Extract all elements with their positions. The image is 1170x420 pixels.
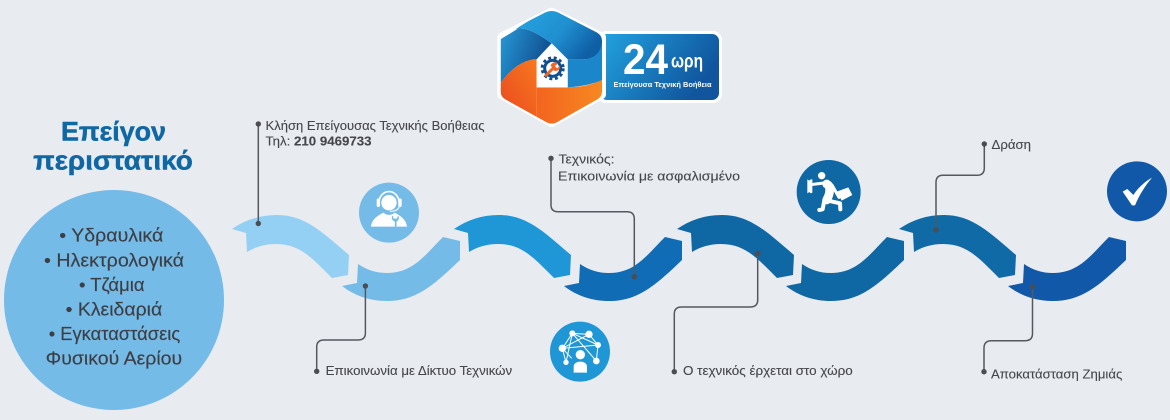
logo badge: 24 ωρη — [597, 31, 722, 103]
step: contact with technician network: Επικοινωνία με Δίκτυο Τεχνικών — [326, 363, 512, 378]
arrow segment 7 — [899, 215, 1016, 278]
icon: check mark — [1107, 161, 1167, 221]
panel: service list circle: • Υδραυλικά — [59, 225, 164, 246]
step: technician arrives on site — [672, 251, 853, 378]
logo hexagon emblem — [497, 7, 605, 127]
step: technician contacts insured — [548, 151, 740, 279]
arrow segment 3 — [454, 215, 571, 278]
arrow segment 6 — [786, 237, 904, 301]
panel: service list circle: • Ηλεκτρολογικά — [44, 250, 184, 270]
step: contact with technician network — [314, 283, 512, 378]
step: technician arrives on site: Ο τεχνικός έρχεται στο χώρο — [683, 363, 853, 378]
panel: service list circle: Φυσικού Αερίου — [46, 347, 182, 368]
title: περιστατικό — [33, 145, 193, 175]
logo: 24-hour emergency technical assistance — [497, 7, 722, 127]
arrow segment 4 — [564, 237, 682, 301]
step: technician contacts insured: Τεχνικός: — [558, 151, 614, 166]
step: damage restoration — [981, 284, 1122, 381]
wave arrow process — [232, 215, 1126, 301]
panel: service list circle: • Κλειδαριά — [66, 298, 163, 319]
title: Επείγον — [61, 117, 166, 147]
arrow segment 5 — [677, 215, 794, 278]
step: action — [933, 137, 1031, 233]
logo badge: 24 ωρη: ωρη — [671, 52, 703, 72]
logo badge: 24 ωρη: 24 — [623, 36, 668, 84]
icon: technician network — [550, 322, 610, 382]
title — [33, 117, 193, 175]
step: call for emergency assistance: Τηλ: 210 9469733 — [266, 134, 372, 149]
step: technician contacts insured: Επικοινωνία με ασφαλισμένο — [558, 169, 740, 184]
icon: call-centre agent with wrench — [359, 183, 419, 243]
step: call for emergency assistance — [256, 118, 484, 226]
step: call for emergency assistance: Κλήση Επείγουσας Τεχνικής Βοήθειας — [266, 118, 484, 133]
icon: running technician with briefcase — [797, 160, 861, 224]
step: damage restoration: Αποκατάσταση Ζημιάς — [991, 366, 1122, 381]
arrow segment 2 — [342, 237, 460, 301]
arrow segment 1 — [232, 215, 349, 278]
panel: service list circle: • Τζάμια — [79, 274, 145, 295]
panel: service list circle: • Εγκαταστάσεις — [49, 323, 180, 344]
panel: service list circle — [4, 190, 224, 410]
arrow segment 8 — [1008, 237, 1126, 301]
logo badge: 24 ωρη: Επείγουσα Τεχνική Βοήθεια — [614, 80, 712, 89]
step: action: Δράση — [992, 137, 1031, 152]
